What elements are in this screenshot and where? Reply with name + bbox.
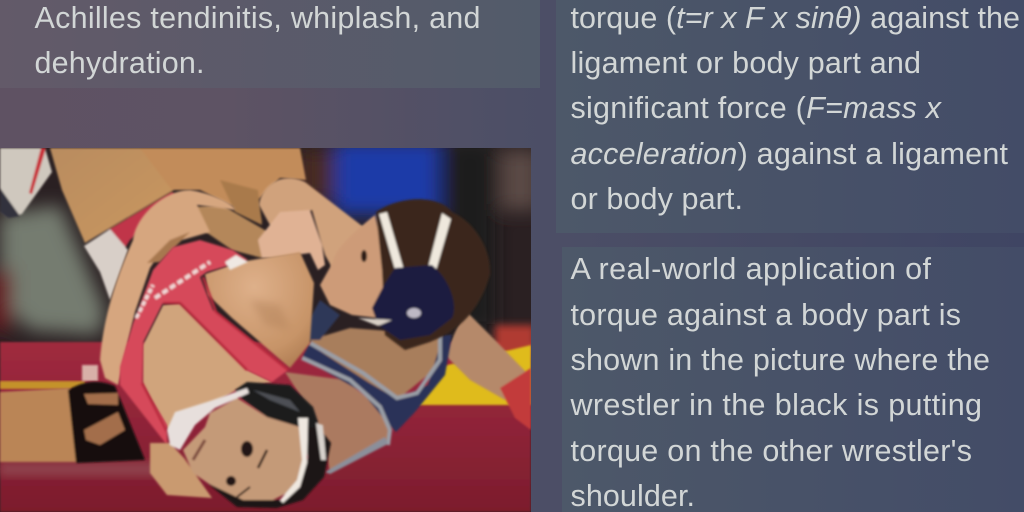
panel: torque and force formulas: torque (t=r x F x sinθ) against the: [570, 1, 1020, 35]
opponent legs and sock: [0, 148, 306, 300]
panel: injuries text: dehydration.: [34, 46, 204, 80]
top wrestler rear leg: [445, 310, 531, 430]
panel: real-world application text: torque on the other wrestler's: [570, 434, 972, 468]
bottom wrestler shoulder and torso: [143, 252, 314, 432]
bottom wrestler head and headgear: [150, 382, 331, 508]
panel: torque and force formulas: ligament or body part and: [570, 46, 921, 80]
panel: real-world application text: shown in the picture where the: [570, 343, 990, 377]
panel: injuries text: [0, 0, 540, 88]
top wrestler chest and singlet: [285, 300, 452, 474]
panel: torque and force formulas: or body part.: [570, 182, 743, 216]
panel: real-world application text: shoulder.: [570, 479, 695, 512]
bottom wrestler red singlet: [120, 240, 288, 445]
panel: torque and force formulas: [556, 0, 1024, 233]
panel: real-world application text: A real-world application of: [570, 252, 932, 286]
blurred arena background: [0, 140, 540, 335]
wrestling mat: [0, 325, 535, 512]
photo: two wrestlers on a mat: [0, 140, 540, 512]
top wrestler head and headgear: [320, 199, 490, 350]
panel: real-world application text: wrestler in the black is putting: [570, 388, 982, 422]
panel: injuries text: Achilles tendinitis, whiplash, and: [34, 1, 480, 35]
bottom wrestler far leg and black sleeve: [0, 382, 145, 463]
bottom wrestler hand and arm: [100, 190, 235, 385]
panel: real-world application text: torque against a body part is: [570, 298, 961, 332]
panel: torque and force formulas: acceleration) against a ligament: [570, 137, 1009, 171]
panel: real-world application text: [562, 247, 1024, 512]
top wrestler forearm and upper arm: [196, 177, 364, 271]
panel: torque and force formulas: significant force (F=mass x: [570, 91, 943, 125]
